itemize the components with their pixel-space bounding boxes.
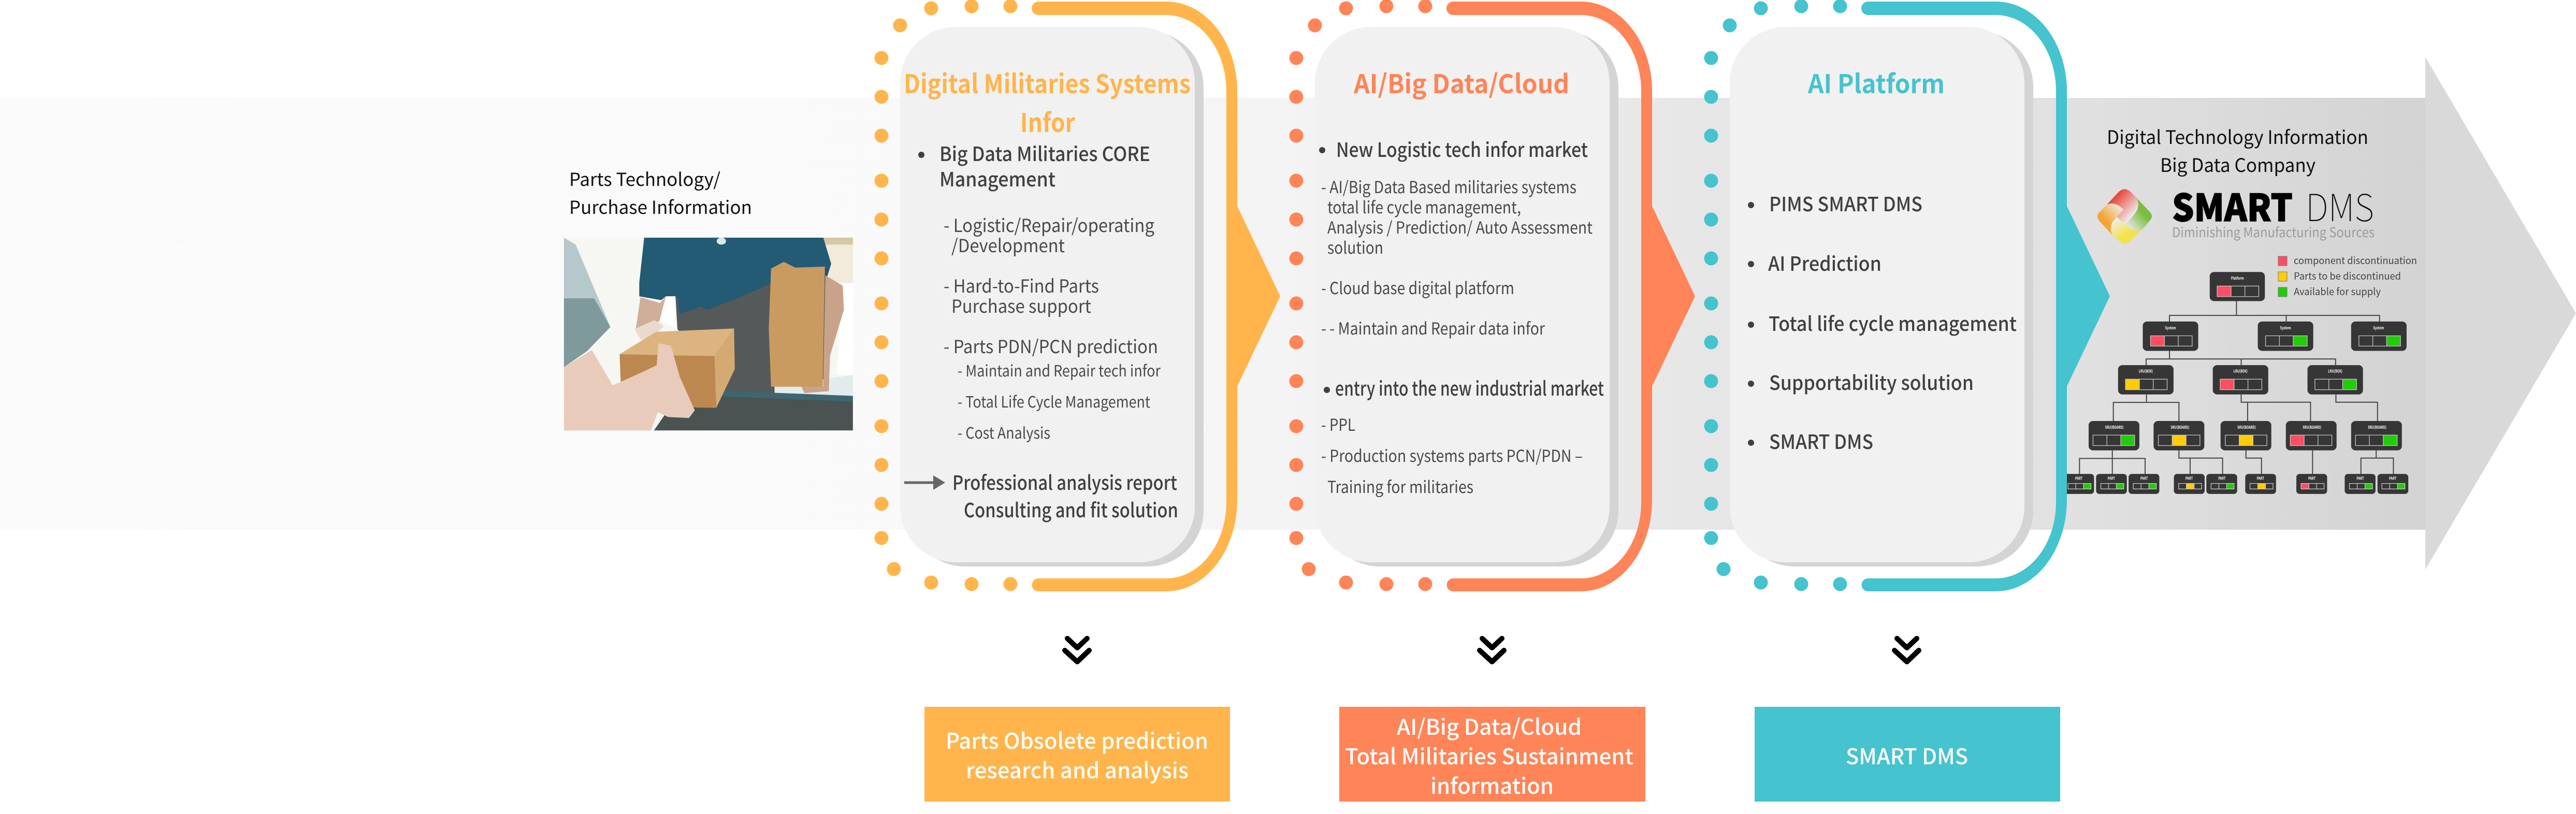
text block: analysis report: Consulting and fit solution [964, 495, 1178, 523]
dotted line [1711, 6, 1840, 584]
heading: Digital Technology Information [2107, 123, 2368, 150]
dotted line [881, 6, 1010, 584]
icon: chevrons 3 [1894, 638, 1919, 662]
heading [2107, 123, 2368, 178]
tree diagram [2063, 272, 2408, 494]
text block: core management: Big Data Militaries CORE [939, 138, 1150, 167]
label: parts technology: Parts Technology/ [569, 165, 720, 192]
icon: chevrons 1 [1065, 638, 1089, 662]
panel: digital militaries systems [881, 2, 1280, 591]
tree diagram: System [2373, 325, 2384, 331]
legend [2278, 253, 2417, 298]
bracket with arrow [1446, 2, 1695, 591]
tree diagram: PART [2308, 476, 2315, 482]
logo wordmark: Diminishing Manufacturing Sources [2172, 222, 2375, 241]
tree diagram: System [2165, 325, 2176, 331]
tree diagram: PART [2108, 476, 2115, 482]
bracket with arrow [1861, 2, 2110, 591]
text block: new logistic market: - - Maintain and Repair data infor [1321, 316, 1545, 340]
arrow: to report [904, 475, 945, 490]
heading [904, 64, 1191, 140]
heading: AI Platform [1807, 64, 1945, 101]
text block: core management: - Logistic/Repair/operating [944, 211, 1154, 238]
background band [0, 98, 2426, 530]
legend: Parts to be discontinued [2294, 269, 2401, 283]
text block: new industrial market: - Production systems parts PCN/PDN – [1321, 443, 1583, 467]
text block: core management: Purchase support [951, 292, 1091, 318]
tree diagram: PART [2389, 476, 2396, 482]
result box: smart dms: SMART DMS [1846, 739, 1968, 771]
heading: Infor [1020, 103, 1075, 140]
label: parts technology [569, 165, 752, 220]
panel: ai big data cloud [1296, 2, 1695, 591]
legend: Available for supply [2294, 284, 2381, 298]
logo wordmark: SMART [2172, 178, 2293, 232]
text block: core management: - Parts PDN/PCN prediction [944, 332, 1158, 359]
text block: platform features: Supportability solution [1769, 367, 1974, 396]
text block: new logistic market: total life cycle management, [1327, 195, 1521, 219]
text block: new logistic market [1319, 134, 1593, 340]
tree diagram: LRU(BOX) [2139, 369, 2153, 374]
text block: new industrial market: entry into the new industrial market [1335, 373, 1604, 401]
tree diagram: LRU(BOX) [2328, 369, 2342, 374]
tree diagram: SRU(BOARD) [2303, 425, 2321, 430]
result box: sustainment: Total Militaries Sustainment [1345, 739, 1633, 771]
text block: core management [918, 138, 1161, 443]
result box: sustainment: information [1430, 769, 1554, 801]
text block: platform features: Total life cycle management [1769, 308, 2017, 337]
text block: new industrial market: - PPL [1321, 412, 1355, 436]
bracket with arrow [1032, 2, 1280, 591]
panel: ai platform [1711, 2, 2110, 591]
text block: core management: Management [939, 164, 1055, 192]
legend: component discontinuation [2294, 253, 2417, 267]
text block: new logistic market: solution [1327, 235, 1383, 259]
text block: core management: - Hard-to-Find Parts [944, 272, 1099, 298]
result box: smart dms [1755, 707, 2060, 802]
logo wordmark [2172, 178, 2375, 241]
tree diagram: SRU(BOARD) [2170, 425, 2189, 430]
icon: chevrons 2 [1480, 638, 1504, 662]
tree diagram: PART [2075, 476, 2082, 482]
tree diagram: PART [2186, 476, 2193, 482]
text block: new logistic market: New Logistic tech infor market [1336, 134, 1588, 163]
tree diagram: SRU(BOARD) [2368, 425, 2386, 430]
text block: analysis report: Professional analysis report [952, 467, 1177, 496]
text block: core management: - Cost Analysis [958, 420, 1050, 443]
card [1730, 27, 2024, 562]
result box: parts obsolete [924, 707, 1230, 802]
text block: platform features: AI Prediction [1768, 248, 1882, 277]
text block: core management: - Maintain and Repair tech infor [958, 358, 1161, 381]
tree diagram: PART [2257, 476, 2264, 482]
result box: parts obsolete: research and analysis [966, 753, 1189, 785]
heading: Digital Militaries Systems [904, 64, 1191, 101]
card shadow [909, 31, 1204, 566]
text block: new industrial market [1321, 373, 1604, 498]
text block: new logistic market: - AI/Big Data Based militaries systems [1321, 175, 1576, 198]
tree diagram: SRU(BOARD) [2105, 425, 2124, 430]
tree diagram: PART [2356, 476, 2364, 482]
dotted line [1296, 6, 1425, 584]
big arrow head [2425, 57, 2576, 570]
text block: core management: - Total Life Cycle Management [958, 389, 1150, 412]
right section: digital technology company [2063, 123, 2417, 494]
tree diagram: System [2280, 325, 2291, 331]
tree diagram: PART [2218, 476, 2226, 482]
card shadow [1324, 31, 1618, 566]
label: parts technology: Purchase Information [569, 193, 752, 220]
result box: sustainment: AI/Big Data/Cloud [1397, 710, 1582, 742]
logo wordmark: DMS [2306, 178, 2374, 232]
tree diagram: SRU(BOARD) [2237, 425, 2256, 430]
heading: Big Data Company [2160, 151, 2315, 178]
tree diagram: LRU(BOX) [2233, 369, 2248, 374]
text block: platform features: SMART DMS [1769, 426, 1873, 455]
result box: sustainment [1339, 707, 1645, 802]
photo: parcel delivery [563, 238, 853, 431]
text block: analysis report [952, 467, 1178, 523]
text block: platform features [1748, 188, 2017, 455]
card [1315, 27, 1610, 562]
icon: smart dms logo [2097, 189, 2152, 244]
text block: new logistic market: - Cloud base digital platform [1321, 275, 1514, 299]
text block: new logistic market: Analysis / Prediction/ Auto Assessment [1327, 215, 1593, 239]
heading: AI/Big Data/Cloud [1353, 64, 1569, 101]
text block: core management: /Development [951, 231, 1065, 258]
tree diagram: PART [2140, 476, 2148, 482]
card shadow [1739, 31, 2033, 566]
card [900, 27, 1195, 562]
result box: parts obsolete: Parts Obsolete prediction [946, 724, 1208, 755]
tree diagram: Platform [2231, 275, 2244, 281]
text block: platform features: PIMS SMART DMS [1769, 188, 1922, 217]
text block: new industrial market: Training for militaries [1327, 474, 1473, 498]
